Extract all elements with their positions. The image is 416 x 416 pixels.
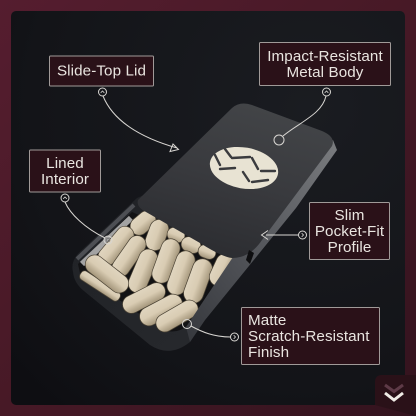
- callout: Slim Pocket-Fit Profile: Pocket-Fit: [315, 223, 385, 240]
- tin side strip: [186, 140, 337, 342]
- connector: [283, 96, 326, 136]
- callout: Slim Pocket-Fit Profile: Slim: [335, 207, 364, 224]
- connector arrow: [103, 96, 177, 148]
- label box: [30, 150, 100, 192]
- callout: Lined Interior: Interior: [41, 171, 89, 188]
- lid: [138, 104, 333, 258]
- callout: Matte Scratch-Resistant Finish: [182, 308, 380, 364]
- label box: [50, 56, 154, 86]
- label box: [310, 202, 390, 260]
- tin interior: [78, 212, 233, 332]
- callout: Slide-Top Lid: Slide-Top Lid: [57, 62, 146, 80]
- tin rim: [77, 205, 134, 259]
- connector: [191, 326, 230, 337]
- tin body: [72, 150, 336, 351]
- capsules: [78, 207, 238, 335]
- callout: Impact-Resistant Metal Body: [260, 42, 390, 145]
- callout: Slim Pocket-Fit Profile: Profile: [328, 239, 371, 256]
- callout: Lined Interior: Lined: [46, 155, 84, 172]
- callout: Impact-Resistant Metal Body: Metal Body: [287, 64, 364, 81]
- icon: muted chevron: [385, 385, 403, 392]
- product: metal tin with capsules: [72, 104, 337, 351]
- callout: Matte Scratch-Resistant Finish: Scratch-Resistant: [248, 328, 370, 345]
- callout: Slide-Top Lid: [50, 56, 178, 152]
- callout: Matte Scratch-Resistant Finish: Finish: [248, 344, 289, 361]
- label box: [242, 308, 380, 364]
- connector: [65, 202, 105, 238]
- callout: Lined Interior: [30, 150, 112, 244]
- callout: Impact-Resistant Metal Body: Impact-Resistant: [267, 48, 383, 65]
- connector arrow: [266, 234, 299, 236]
- corner chevron badge: [375, 375, 416, 416]
- logo: [206, 142, 282, 194]
- badge notch: [375, 375, 416, 416]
- callout: Matte Scratch-Resistant Finish: Matte: [248, 312, 286, 329]
- interior lining: [82, 218, 131, 264]
- icon: white chevron: [385, 393, 403, 400]
- callout: Slim Pocket-Fit Profile: [262, 202, 390, 260]
- lid notch: [246, 250, 254, 264]
- label box: [260, 42, 390, 86]
